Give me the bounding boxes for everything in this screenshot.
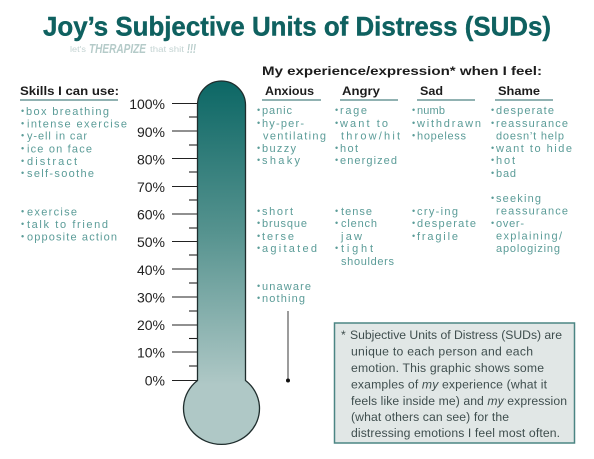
sad: mid distress words <box>412 206 476 243</box>
shame: mid distress words: reassurance <box>496 206 568 218</box>
column: angry <box>335 86 400 268</box>
percent labels: 30% <box>137 290 165 306</box>
shame: high distress words: doesn’t help <box>496 130 564 142</box>
sad: high distress words: withdrawn <box>416 118 481 130</box>
callout text: feels like inside me) and my expression <box>351 394 567 408</box>
skills text: upper group: • <box>21 130 24 140</box>
skills text: lower group <box>21 206 117 244</box>
sad: high distress words <box>412 105 481 142</box>
sad: high distress words: • <box>412 118 415 128</box>
skills text: upper group: intense exercise <box>27 118 127 130</box>
sad: mid distress words: • <box>412 206 415 216</box>
angry: mid distress words: • <box>335 243 338 253</box>
shame: mid distress words: seeking <box>496 193 541 205</box>
callout text: * <box>341 328 346 342</box>
skills text: lower group: exercise <box>27 206 77 218</box>
anxious: high distress words: ventilating <box>263 130 326 142</box>
anxious: high distress words: • <box>257 118 260 128</box>
percent labels: 50% <box>137 234 165 250</box>
anxious: low distress words: • <box>257 293 260 303</box>
callout: SUDs explanation <box>334 323 574 443</box>
subtitle tagline: that shit <box>150 44 185 54</box>
sad: mid distress words: fragile <box>417 231 458 243</box>
percent labels: 90% <box>137 124 165 140</box>
callout text: distressing emotions I feel most often. <box>351 426 560 440</box>
shame: mid distress words <box>491 193 568 255</box>
percent labels: 100% <box>129 96 165 112</box>
angry: high distress words: hot <box>340 143 358 155</box>
percent labels <box>129 96 165 388</box>
thermometer body <box>184 81 260 444</box>
angry: high distress words: rage <box>340 105 367 117</box>
anxious: high distress words <box>257 105 326 167</box>
shame: high distress words: • <box>491 143 494 153</box>
callout text: examples of my experience (what it <box>351 378 548 392</box>
heading: angry: Angry <box>342 86 381 98</box>
skills text: lower group: • <box>21 206 24 216</box>
angry: mid distress words: jaw <box>340 231 362 243</box>
shame: high distress words: • <box>491 168 494 178</box>
anxious: low distress words: nothing <box>262 293 305 305</box>
skills text: upper group: • <box>21 168 24 178</box>
heading: skills: Skills I can use: <box>20 86 119 98</box>
subtitle tagline: !!! <box>187 41 196 56</box>
shame: mid distress words: apologizing <box>496 243 560 255</box>
anxious: low distress words: • <box>257 281 260 291</box>
thermometer chart <box>129 81 260 444</box>
percent labels: 20% <box>137 317 165 333</box>
percent scale ticks <box>172 104 198 380</box>
anxious: low distress words: unaware <box>262 281 311 293</box>
heading: shame: Shame <box>498 86 540 98</box>
anxious: high distress words: hy-per- <box>262 118 304 130</box>
anxious: mid distress words <box>257 206 317 255</box>
sad: mid distress words: • <box>412 231 415 241</box>
shame: high distress words: want to hide <box>495 143 572 155</box>
skills text: lower group: talk to friend <box>27 219 108 231</box>
anxious: mid distress words: • <box>257 243 260 253</box>
sad: high distress words: numb <box>417 105 445 117</box>
angry: high distress words: energized <box>340 155 397 167</box>
anxious: high distress words: • <box>257 143 260 153</box>
angry: high distress words <box>335 105 400 167</box>
shame: high distress words: reassurance <box>496 118 568 130</box>
percent labels: 0% <box>145 372 165 388</box>
skills text: upper group: • <box>21 156 24 166</box>
shame: high distress words: desperate <box>496 105 554 117</box>
shame: mid distress words: • <box>491 193 494 203</box>
shame: mid distress words: explaining/ <box>496 230 563 242</box>
skills text: upper group: • <box>21 118 24 128</box>
heading: experience and expression: My experience/expression* when I feel: <box>262 66 542 78</box>
angry: mid distress words: • <box>335 218 338 228</box>
angry: mid distress words: • <box>335 206 338 216</box>
skills text: upper group: distract <box>27 156 77 168</box>
angry: mid distress words <box>335 206 394 268</box>
anxious: mid distress words: • <box>257 231 260 241</box>
anxious: high distress words: • <box>257 105 260 115</box>
sad: high distress words: • <box>412 130 415 140</box>
angry: high distress words: • <box>335 118 338 128</box>
skills text: lower group: • <box>21 219 24 229</box>
skills text: upper group <box>21 106 127 180</box>
range line with end dot <box>286 311 290 382</box>
anxious: low distress words <box>257 281 311 305</box>
angry: high distress words: • <box>335 105 338 115</box>
anxious: high distress words: buzzy <box>262 143 296 155</box>
angry: high distress words: • <box>335 143 338 153</box>
shame: mid distress words: over- <box>496 218 524 230</box>
column: sad <box>412 86 481 243</box>
anxious: mid distress words: • <box>257 218 260 228</box>
shame: high distress words <box>491 105 572 180</box>
anxious: mid distress words: • <box>257 206 260 216</box>
skills text: upper group: ice on face <box>27 144 92 156</box>
angry: high distress words: throw/hit <box>341 130 400 142</box>
percent labels: 10% <box>137 344 165 360</box>
subtitle tagline: let's <box>70 44 86 54</box>
skills text: upper group: • <box>21 144 24 154</box>
callout text: unique to each person and each <box>351 344 533 358</box>
percent labels: 70% <box>137 179 165 195</box>
callout text: emotion. This graphic shows some <box>351 361 544 375</box>
anxious: mid distress words: brusque <box>262 218 307 230</box>
anxious: high distress words: panic <box>262 105 292 117</box>
skills text: upper group: self-soothe <box>27 168 94 180</box>
percent labels: 60% <box>137 206 165 222</box>
sad: mid distress words: desperate <box>417 218 476 230</box>
callout text: Subjective Units of Distress (SUDs) are <box>350 328 562 342</box>
anxious: mid distress words: terse <box>262 231 294 243</box>
sad: high distress words: • <box>412 105 415 115</box>
panel: skills list <box>20 86 127 244</box>
subtitle tagline <box>70 41 196 56</box>
skills text: lower group: opposite action <box>27 232 117 244</box>
heading: anxious: Anxious <box>265 86 314 98</box>
callout text: (what others can see) for the <box>351 410 509 424</box>
callout text <box>341 328 567 440</box>
angry: high distress words: want to <box>339 118 388 130</box>
skills text: upper group: y-ell in car <box>27 130 87 142</box>
angry: mid distress words: tense <box>341 206 372 218</box>
heading: sad: Sad <box>420 86 443 98</box>
column: shame <box>491 86 572 255</box>
sad: high distress words: hopeless <box>417 130 466 142</box>
sad: mid distress words: cry-ing <box>417 206 458 218</box>
angry: high distress words: • <box>335 155 338 165</box>
shame: high distress words: • <box>491 105 494 115</box>
title: Joy’s Subjective Units of Distress (SUDs) <box>43 12 551 42</box>
anxious: high distress words: • <box>257 155 260 165</box>
skills text: upper group: box breathing <box>26 106 109 118</box>
shame: high distress words: • <box>491 118 494 128</box>
angry: mid distress words: shoulders <box>341 256 394 268</box>
subtitle tagline: THERAPIZE <box>89 41 146 56</box>
sad: mid distress words: • <box>412 218 415 228</box>
shame: mid distress words: • <box>491 218 494 228</box>
angry: mid distress words: tight <box>341 243 373 255</box>
column: anxious <box>257 86 326 382</box>
skills text: upper group: • <box>21 106 24 116</box>
shame: high distress words: hot <box>496 155 515 167</box>
percent labels: 40% <box>137 262 165 278</box>
percent labels: 80% <box>137 152 165 168</box>
skills text: lower group: • <box>21 232 24 242</box>
anxious: high distress words: shaky <box>262 155 300 167</box>
shame: high distress words: bad <box>496 168 516 180</box>
shame: high distress words: • <box>491 155 494 165</box>
anxious: mid distress words: agitated <box>262 243 317 255</box>
anxious: mid distress words: short <box>262 206 293 218</box>
angry: mid distress words: clench <box>341 218 377 230</box>
